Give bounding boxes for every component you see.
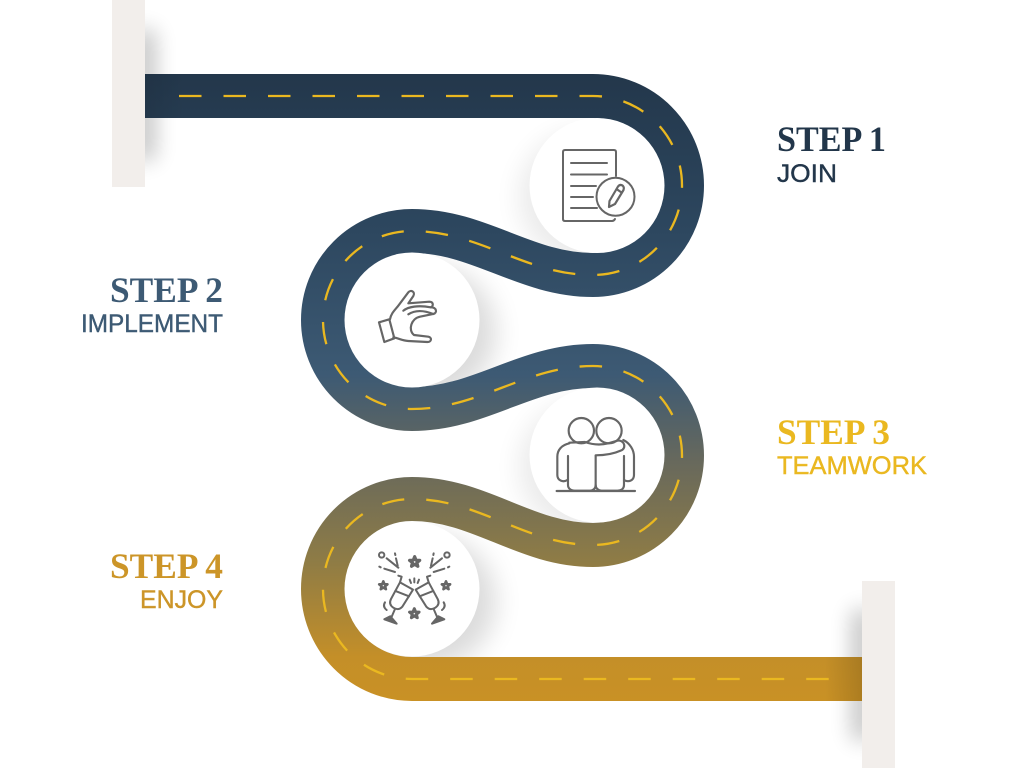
step 4 label bbox=[110, 546, 223, 614]
shadow: start post bbox=[133, 30, 155, 160]
shadow: circle 2 bbox=[364, 266, 496, 398]
start post bbox=[112, 0, 145, 187]
step 1 heading: STEP 1 bbox=[777, 119, 886, 159]
shadow: circle 1 bbox=[519, 131, 651, 263]
icon: document with pencil bbox=[563, 150, 634, 221]
road shading: start bbox=[145, 74, 185, 118]
step 3 label bbox=[777, 412, 927, 480]
step 4 subtitle: ENJOY bbox=[140, 586, 223, 614]
step 1 label bbox=[777, 119, 886, 188]
circle 2 bbox=[344, 252, 480, 388]
shadow: circle 4 bbox=[364, 535, 496, 667]
step 2 heading: STEP 2 bbox=[110, 270, 223, 310]
circle 1 bbox=[530, 118, 664, 253]
road centre dashes bbox=[179, 96, 830, 679]
shadow: end post bbox=[852, 610, 874, 740]
step 1 subtitle: JOIN bbox=[777, 160, 837, 188]
icon: champagne toast bbox=[379, 552, 450, 624]
icon: hand bbox=[379, 291, 436, 342]
step 3 heading: STEP 3 bbox=[777, 412, 890, 452]
step 4 heading: STEP 4 bbox=[110, 546, 223, 586]
winding road bbox=[145, 96, 862, 679]
icon: two friends embracing bbox=[557, 418, 635, 491]
circle 3 bbox=[530, 388, 664, 522]
circle 4 bbox=[344, 522, 480, 656]
step 3 subtitle: TEAMWORK bbox=[777, 452, 927, 480]
end post bbox=[862, 581, 895, 768]
step 2 label bbox=[81, 270, 223, 338]
road shading: end bbox=[825, 657, 862, 701]
step 2 subtitle: IMPLEMENT bbox=[81, 310, 223, 338]
shadow: circle 3 bbox=[519, 401, 651, 533]
